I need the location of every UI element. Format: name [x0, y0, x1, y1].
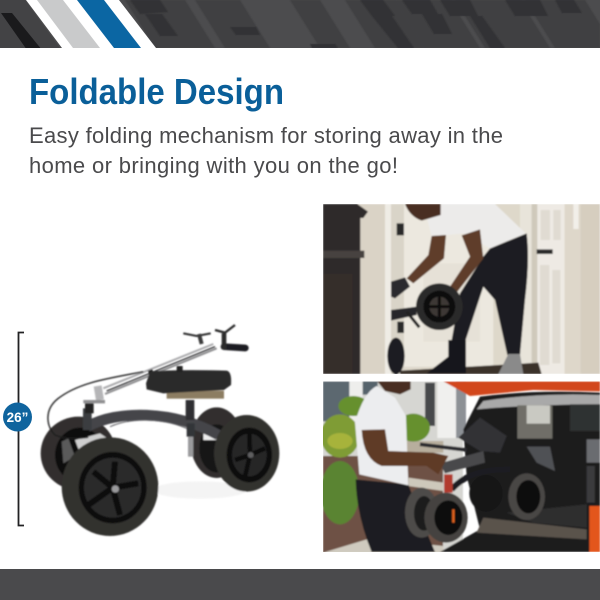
frame	[87, 400, 218, 457]
folded scooter in trunk	[405, 418, 545, 543]
angled brand stripes	[26, 0, 156, 48]
left corner dark stripes	[0, 0, 60, 50]
photo: man loading scooter into car	[321, 381, 600, 553]
back left wheel	[41, 417, 116, 490]
house background	[323, 381, 466, 553]
description text: Easy folding mechanism for storing away in the	[29, 123, 503, 148]
back right wheel	[191, 407, 243, 478]
man's arm	[362, 429, 448, 474]
front left wheel	[62, 437, 158, 536]
height badge	[3, 402, 32, 432]
scooter wheels	[405, 473, 545, 543]
title: Foldable Design	[29, 71, 284, 112]
floor shadow	[153, 481, 247, 499]
handlebar grip and brake levers	[183, 325, 245, 349]
photo: man folding scooter at closet	[323, 204, 600, 374]
brake cable	[48, 372, 143, 438]
handlebar stem	[83, 344, 217, 413]
knee scooter product image	[41, 325, 279, 536]
door and wall	[385, 204, 600, 374]
height dimension bracket	[3, 332, 32, 526]
front right wheel	[214, 415, 279, 492]
bottom bar	[0, 569, 600, 600]
height badge: 26”	[7, 410, 28, 425]
top banner	[0, 0, 600, 50]
folded scooter	[387, 277, 463, 374]
description text: home or bringing with you on the go!	[29, 153, 398, 178]
description text	[29, 123, 503, 178]
car interior and tailgate	[440, 381, 600, 552]
man	[355, 381, 435, 552]
knee seat pad	[146, 366, 231, 399]
dark cabinet	[323, 204, 368, 374]
man	[405, 204, 528, 374]
green shrubs	[321, 396, 430, 524]
